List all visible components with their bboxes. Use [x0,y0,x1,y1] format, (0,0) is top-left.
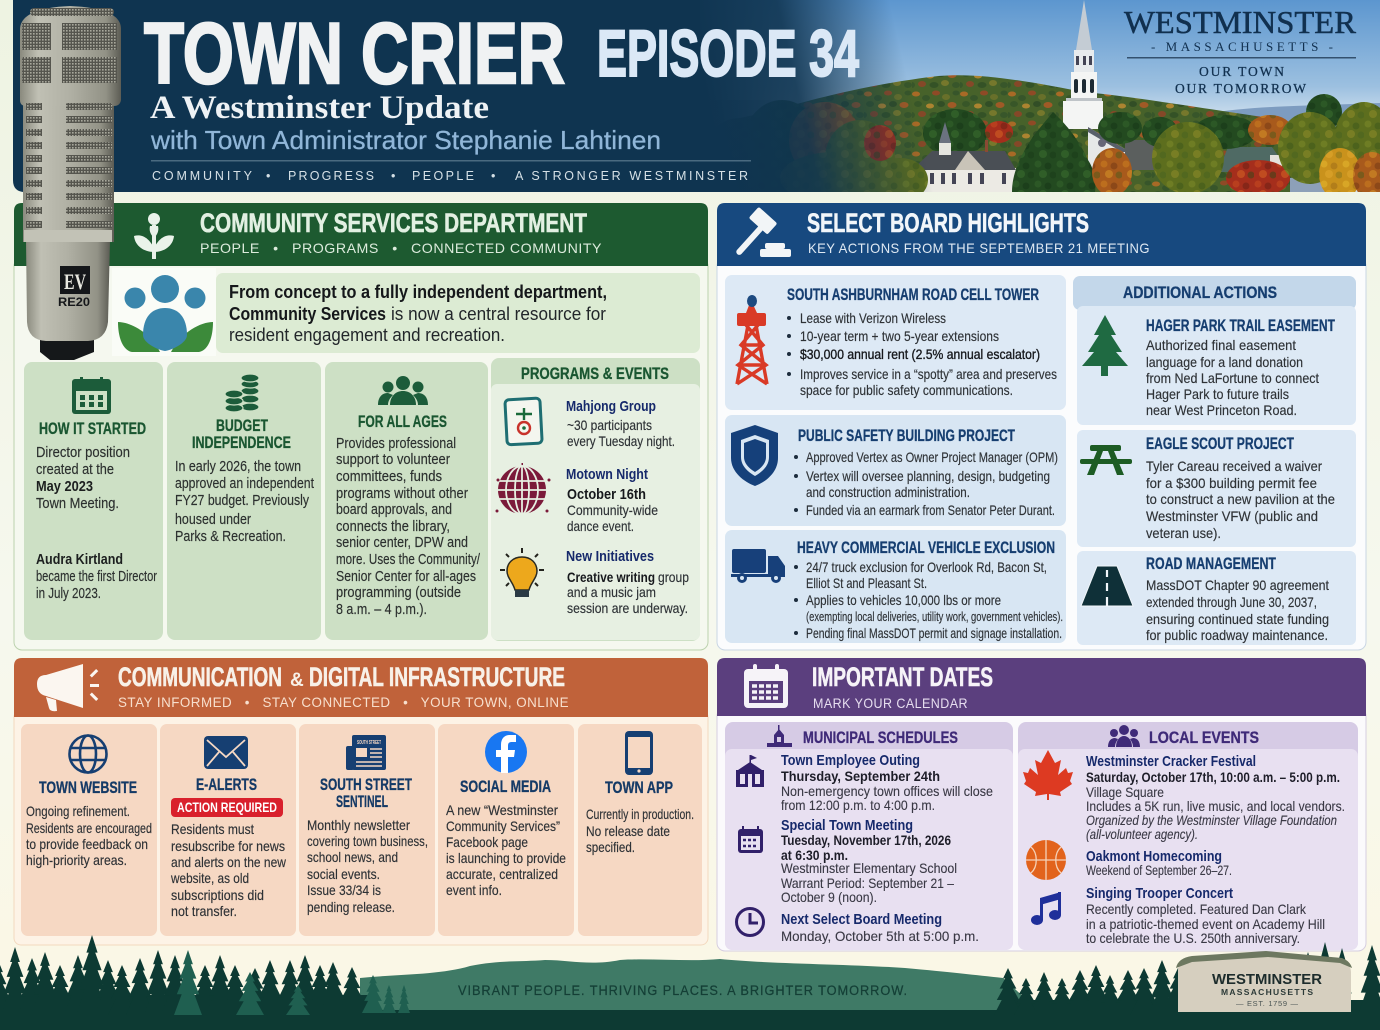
card: south street sentinel [299,724,435,936]
card: how it started: in July 2023. [36,586,101,602]
column: municipal schedules: October 9 (noon). [781,889,877,905]
header banner [13,0,1380,204]
episode number: EPISODE 34 [597,16,859,90]
icon: newspaper: SOUTH STREET [357,740,381,746]
tagline strip: COMMUNITY [152,169,253,183]
mic grille [22,8,117,228]
card: programs and events: Motown Night [566,466,648,483]
community section header: COMMUNITY SERVICES DEPARTMENT [200,208,587,238]
card: programs and events: Creative writing [567,569,655,585]
tagline strip: • [266,169,270,183]
card: e-alerts: Residents must [171,821,254,837]
card: heavy commercial vehicle exclusion: Elliot St and Pleasant St. [806,575,927,591]
card: budget independence: In early 2026, the town [175,459,301,475]
icon: newspaper [346,735,386,770]
card: hager park [1077,306,1356,425]
card: eagle scout: to construct a new pavilion at the [1146,491,1335,507]
card: how it started: became the first Director [36,569,157,585]
card: social media: A new “Westminster [446,802,558,818]
panel: community services department [14,203,708,650]
card: cell tower: SOUTH ASHBURNHAM ROAD CELL TOWER [787,286,1039,304]
icon: mahjong tile [505,398,542,445]
column: municipal schedules: Warrant Period: September 21 – [781,875,954,891]
card: e-alerts: subscriptions did [171,887,264,903]
icon: coins [225,374,259,412]
icon: people with leaves [118,275,213,352]
card: for all ages: committees, funds [336,469,442,485]
icon: people [1108,725,1140,747]
column: local events: Includes a 5K run, live music, and local vendors. [1086,798,1345,814]
card: town website: Residents are encouraged [26,820,152,836]
card: social media: Community Services” [446,818,560,834]
foreground trees [757,94,1380,192]
card: programs and events: and a music jam [567,584,656,600]
card: cell tower: $30,000 annual rent (2.5% annual escalator) [800,346,1040,362]
subtitle: A Westminster Update [150,90,489,126]
presenter line: with Town Administrator Stephanie Lahtinen [150,125,661,155]
card: town website: TOWN WEBSITE [39,778,137,797]
column: municipal schedules: Non-emergency town offices will close [781,783,993,799]
card: for all ages: support to volunteer [336,452,450,468]
card: budget independence: approved an independent [175,476,314,492]
card: for all ages: senior center, DPW and [336,535,468,551]
card: south street sentinel: SOUTH STREET [320,775,412,794]
column: municipal schedules: from 12:00 p.m. to 4:00 p.m. [781,797,935,813]
card: road management: ROAD MANAGEMENT [1146,555,1276,573]
card: heavy commercial vehicle exclusion: Applies to vehicles 10,000 lbs or more [806,592,1001,608]
card: cell tower: space for public safety communications. [800,382,1013,398]
card: social media: SOCIAL MEDIA [460,777,551,796]
card: south street sentinel: Issue 33/34 is [307,882,381,898]
card: programs and events: PROGRAMS & EVENTS [521,364,669,383]
card: heavy commercial vehicle exclusion: (exempting local deliveries, utility work, government vehicles). [806,610,1063,624]
card: how it started: Audra Kirtland [36,552,123,568]
icon: group of people [378,376,428,405]
column: local events: to celebrate the U.S. 250th anniversary. [1086,930,1300,946]
card: programs and events: Community-wide [567,502,658,518]
communication header: COMMUNICATION [118,662,282,692]
card: south street sentinel: pending release. [307,899,395,915]
icon: calendar [72,377,111,414]
card: programs and events: dance event. [567,518,634,534]
column: municipal schedules: Tuesday, November 17th, 2026 [781,832,951,848]
card: how it started [24,362,163,640]
town sign: — EST. 1759 — [1236,999,1298,1008]
icon: road [1081,566,1133,606]
card: south street sentinel: covering town business, [307,833,428,849]
column: local events: Oakmont Homecoming [1086,848,1222,865]
tagline strip [152,169,748,183]
community section header [14,203,708,266]
card: south street sentinel: SENTINEL [336,792,388,811]
panel: select board highlights [717,203,1366,650]
card: social media [438,724,574,936]
card: public safety building: Approved Vertex as Owner Project Manager (OPM) [806,449,1058,465]
card: heavy commercial vehicle exclusion [725,530,1066,643]
card: e-alerts: and alerts on the new [171,854,287,870]
card: budget independence: FY27 budget. Previously [175,493,310,509]
card: hager park: near West Princeton Road. [1146,402,1297,418]
icon: cell tower [737,295,767,384]
intro callout: is now a central resource for [391,304,606,324]
icon: globe [70,736,106,772]
town sign: MASSACHUSETTS [1221,987,1313,997]
card: programs and events [491,358,700,641]
card: eagle scout: Westminster VFW (public and [1146,508,1318,524]
column: local events: Village Square [1086,784,1164,800]
card: eagle scout: for a $300 building permit fee [1146,475,1317,491]
column: municipal schedules: Thursday, September 24th [781,768,940,784]
card: town website: high-priority areas. [26,852,127,868]
communication header: DIGITAL INFRASTRUCTURE [309,662,565,692]
tagline strip: PROGRESS [288,169,374,183]
column: municipal schedules: Westminster Elementary School [781,860,957,876]
card: programs and events: group [658,569,689,585]
select board header: SELECT BOARD HIGHLIGHTS [807,208,1089,238]
mic logo: RE20 [58,295,90,309]
Westminster logo: - MASSACHUSETTS - [1151,39,1333,54]
church [1063,0,1125,169]
card: how it started: HOW IT STARTED [39,419,146,438]
column: municipal schedules: Next Select Board Meeting [781,911,942,928]
icon: phone [625,731,653,775]
card: heavy commercial vehicle exclusion: 24/7 truck exclusion for Overlook Rd, Bacon St, [806,559,1047,575]
select board header [717,203,1366,266]
card: public safety building: PUBLIC SAFETY BUILDING PROJECT [798,427,1015,445]
footer tagline: VIBRANT PEOPLE. THRIVING PLACES. A BRIGHTER TOMORROW. [458,983,908,998]
select board header: KEY ACTIONS FROM THE SEPTEMBER 21 MEETING [808,240,1150,256]
card: south street sentinel: social events. [307,866,380,882]
card: heavy commercial vehicle exclusion: Pending final MassDOT permit and signage installation. [806,625,1062,641]
card: budget independence: INDEPENDENCE [192,433,291,452]
card: budget independence [167,362,321,640]
tagline strip: • [491,169,495,183]
icon: music notes [1031,892,1061,925]
column: local events: (all-volunteer agency). [1086,826,1198,842]
card: social media: accurate, centralized [446,866,558,882]
card: for all ages: board approvals, and [336,502,452,518]
important dates header: MARK YOUR CALENDAR [813,695,968,711]
card: south street sentinel: school news, and [307,849,398,865]
column: local events: Weekend of September 26–27. [1086,862,1232,878]
intro callout [112,268,700,356]
icon: pine tree [1082,315,1128,376]
panel: important dates [717,658,1366,951]
town sign [1176,951,1352,1012]
microphone [20,6,121,360]
card: hager park: from Ned LaFortune to connect [1146,370,1319,386]
background trees [923,109,1288,151]
photo: town landscape [742,0,1380,192]
card: hager park: language for a land donation [1146,354,1303,370]
intro callout: From concept to a fully independent department, [229,282,607,302]
card: cell tower: 10-year term + two 5-year extensions [800,328,999,344]
card: town app: specified. [586,839,635,855]
icon: small calendar [738,826,763,853]
Westminster logo: OUR TOWN [1199,64,1284,79]
card: town app: TOWN APP [605,778,673,797]
title: Town Crier: TOWN CRIER [144,6,565,102]
card: programs and events: ~30 participants [567,417,652,433]
column: local events [1018,722,1358,950]
icon: gavel [735,207,791,257]
badge: action required: ACTION REQUIRED [177,800,277,815]
column: local events: Westminster Cracker Festival [1086,753,1256,770]
card: cell tower: Lease with Verizon Wireless [800,310,946,326]
card: road management [1077,551,1356,645]
communication header: STAY INFORMED • STAY CONNECTED • YOUR TOWN, ONLINE [118,694,569,710]
card: heavy commercial vehicle exclusion: HEAVY COMMERCIAL VEHICLE EXCLUSION [797,539,1055,557]
important dates header: IMPORTANT DATES [812,662,993,692]
card: town website: to provide feedback on [26,836,148,852]
community section header: PEOPLE • PROGRAMS • CONNECTED COMMUNITY [200,240,602,256]
card: public safety building: Funded via an earmark from Senator Peter Durant. [806,502,1055,518]
card: road management: extended through June 30, 2037, [1146,594,1317,610]
icon: sprout [134,213,174,259]
communication header: & [290,670,304,691]
icon: truck [731,549,785,583]
card: e-alerts: resubscribe for news [171,838,285,854]
icon: maple leaf [1023,750,1073,800]
card: cell tower: Improves service in a “spotty” area and preserves [800,366,1057,382]
card: public safety building [725,415,1066,526]
icon: light bulb [500,548,544,597]
card: how it started: created at the [36,462,114,478]
column: additional actions heading: ADDITIONAL ACTIONS [1123,283,1277,302]
back houses [1125,140,1282,172]
icon: facebook [485,731,527,773]
town sign: WESTMINSTER [1212,971,1322,988]
card: for all ages: Senior Center for all-ages [336,569,476,585]
card: for all ages: connects the library, [336,519,450,535]
card: south street sentinel: Monthly newsletter [307,817,410,833]
card: for all ages: programming (outside [336,585,461,601]
card: e-alerts: website, as old [170,870,249,886]
card: cell tower [725,275,1066,410]
card: programs and events: October 16th [567,486,646,503]
card: road management: MassDOT Chapter 90 agreement [1146,577,1329,593]
card: social media: event info. [446,882,502,898]
tagline strip: • [391,169,395,183]
card: for all ages: more. Uses the Community/ [336,552,481,568]
icon: town hall [767,725,792,747]
icon: picnic table [1080,445,1132,475]
icon: envelope [204,736,248,769]
card: eagle scout: Tyler Careau received a waiver [1146,458,1322,474]
card: public safety building: Vertex will oversee planning, design, budgeting [806,468,1050,484]
icon: shield [731,425,778,486]
card: budget independence: housed under [175,512,251,528]
card: hager park: Hager Park to future trails [1146,386,1289,402]
column: local events: Singing Trooper Concert [1086,885,1233,902]
card: budget independence: BUDGET [216,416,268,435]
communication header [14,658,708,717]
card: for all ages: Provides professional [336,436,456,452]
mic logo: EV [64,269,86,294]
card: programs and events: session are underway. [567,600,688,616]
intro callout: resident engagement and recreation. [229,325,505,345]
panel: communication and digital infrastructure [14,658,708,945]
icon: basketball [1026,840,1066,880]
card: town app [578,724,702,936]
Westminster logo [1124,4,1357,96]
card: e-alerts [160,724,296,936]
card: programs and events: Mahjong Group [566,398,656,415]
card: how it started: May 2023 [36,479,93,495]
card: e-alerts: E-ALERTS [196,775,257,794]
Westminster logo: WESTMINSTER [1124,4,1357,40]
white building [912,122,1325,192]
card: road management: ensuring continued state funding [1146,611,1329,627]
icon: clock [736,908,764,936]
column: additional actions heading [1073,276,1356,310]
card: hager park: Authorized final easement [1146,337,1296,353]
card: social media: is launching to provide [446,850,566,866]
icon: megaphone [37,664,99,711]
card: for all ages: 8 a.m. – 4 p.m.). [336,602,427,618]
icon: calendar [744,664,788,708]
card: eagle scout [1077,430,1356,547]
card: town app: No release date [586,823,670,839]
mic logo [58,266,90,309]
card: e-alerts: not transfer. [171,903,237,919]
card: town app: Currently in production. [586,806,694,822]
icon: disco ball [496,463,550,514]
intro callout: Community Services [229,304,386,324]
card: eagle scout: veteran use). [1146,525,1221,541]
card: for all ages: FOR ALL AGES [358,412,447,431]
card: budget independence: Parks & Recreation. [175,529,286,545]
column: local events: Recently completed. Featured Dan Clark [1086,901,1307,917]
card: for all ages [325,362,488,640]
column: municipal schedules: Town Employee Outing [781,752,920,769]
card: town website: Ongoing refinement. [26,803,130,819]
card: town website [21,724,157,936]
column: municipal schedules: Monday, October 5th at 5:00 p.m. [781,928,979,944]
Westminster logo: OUR TOMORROW [1175,81,1306,96]
column: municipal schedules: MUNICIPAL SCHEDULES [803,729,958,747]
tagline strip: PEOPLE [412,169,474,183]
card: how it started: Town Meeting. [36,496,119,512]
card: programs and events: New Initiatives [566,548,654,565]
column: local events: LOCAL EVENTS [1149,728,1259,747]
footer: forest and hill [0,935,1380,1030]
card: public safety building: and construction administration. [806,484,970,500]
column: local events: in a patriotic-themed event on Academy Hill [1086,916,1325,932]
card: how it started: Director position [36,445,130,461]
column: municipal schedules [725,722,1013,950]
card: eagle scout: EAGLE SCOUT PROJECT [1146,435,1294,453]
badge: action required [171,798,283,817]
important dates header [717,658,1366,716]
column: municipal schedules: at 6:30 p.m. [781,847,848,863]
card: social media: Facebook page [446,834,528,850]
tagline strip: A STRONGER WESTMINSTER [515,169,748,183]
card: for all ages: programs without other [336,486,468,502]
icon: school building [736,755,764,787]
card: programs and events: every Tuesday night. [567,433,675,449]
column: municipal schedules: Special Town Meeting [781,817,913,834]
card: road management: for public roadway maintenance. [1146,627,1328,643]
